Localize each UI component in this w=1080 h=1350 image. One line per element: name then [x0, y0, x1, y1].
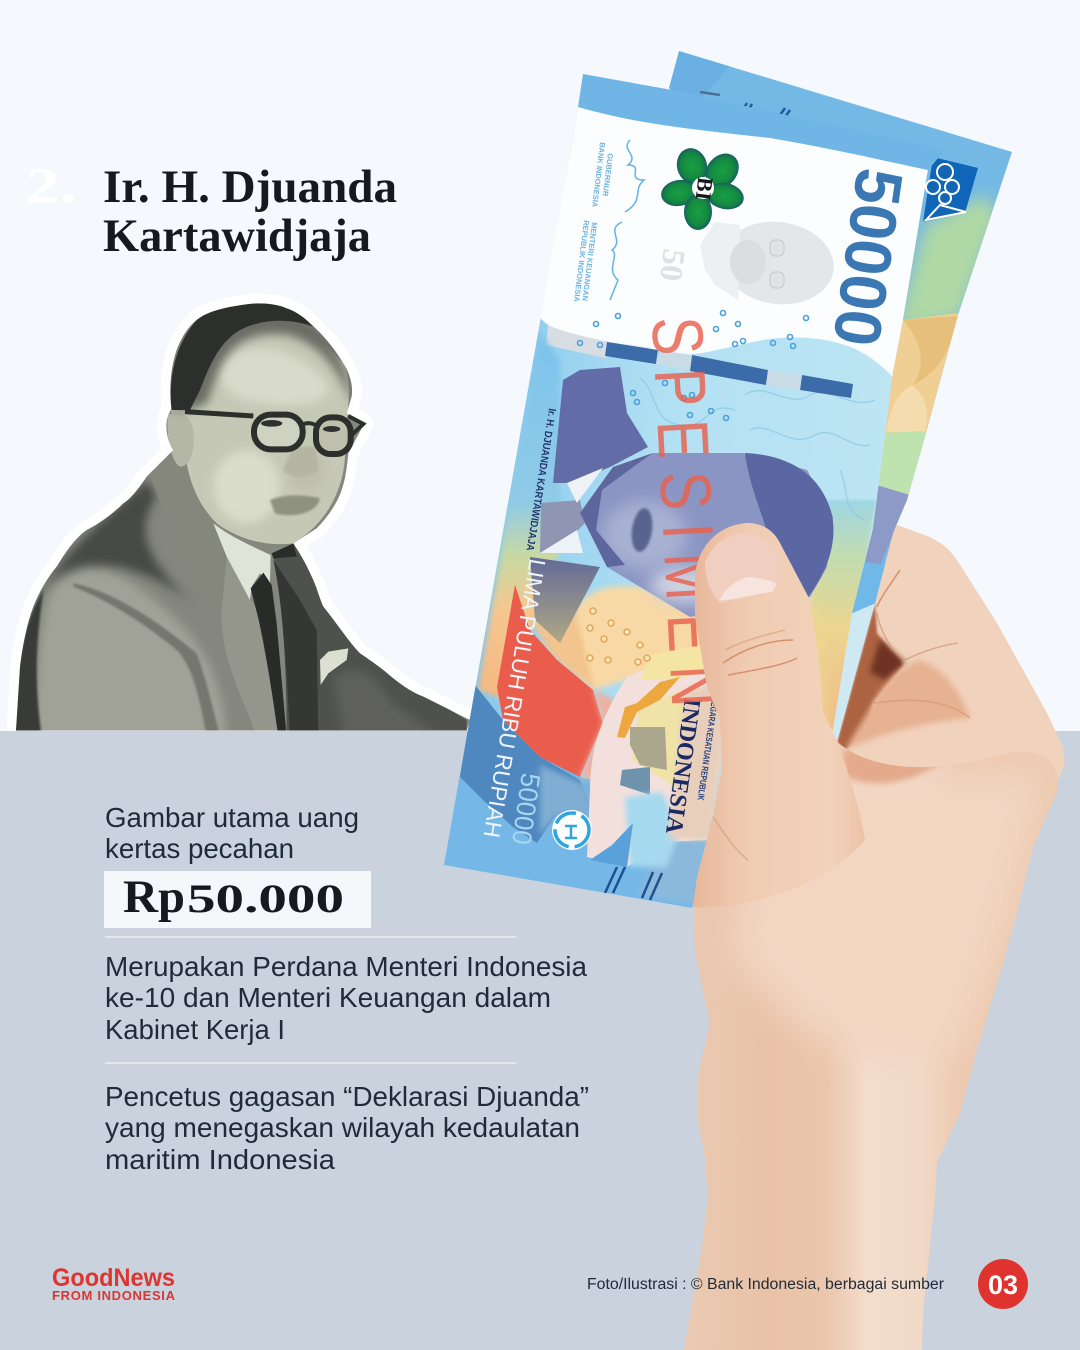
- logo GoodNews: GoodNews: [52, 1264, 175, 1292]
- note name: Ir. H. DJUANDA KARTAWIDJAJA: [523, 408, 558, 552]
- watermark portrait: [700, 215, 839, 311]
- front sheet lower blue: [444, 685, 712, 908]
- front sheet dark blue arc: [460, 685, 590, 843]
- portrait: suit: [553, 367, 648, 483]
- intro text: Gambar utama uang: [105, 802, 359, 833]
- front sheet light blue by seal: [540, 765, 595, 835]
- paragraph: Deklarasi Djuanda: maritim Indonesia: [105, 1144, 335, 1175]
- jacket light left arm: [33, 569, 227, 737]
- small captions: MENTERI KEUANGAN: [580, 222, 599, 301]
- palm upper light: [730, 760, 1040, 1060]
- front sheet holographic right edge: [800, 500, 876, 735]
- finger lines: [713, 570, 970, 860]
- portrait: face edge: [580, 453, 653, 567]
- INDONESIA: INDONESIA: [660, 696, 705, 836]
- paragraph: prime minister: [105, 951, 587, 1045]
- title: Ir. H. Djuanda: [103, 161, 397, 213]
- portrait figure: [16, 303, 470, 730]
- small captions: GUBERNUR: [601, 153, 615, 197]
- mouth: [270, 495, 320, 515]
- glasses: [185, 412, 363, 454]
- portrait: eye feature: [629, 507, 655, 553]
- jacket shoulder shadow: [40, 478, 184, 597]
- hand: palm and thumb: [684, 523, 1058, 1350]
- back sheet pale strip: [832, 604, 875, 741]
- thumb: [693, 523, 865, 907]
- number 2: 2.: [25, 157, 77, 213]
- lower suit: [530, 557, 600, 643]
- denomination in words: LIMA PULUH RIBU RUPIAH: [479, 557, 551, 840]
- hair soft edge: [171, 302, 352, 410]
- bottom ticks: [605, 867, 662, 900]
- back sheet flower: [883, 313, 958, 433]
- middle finger shading: [845, 660, 970, 750]
- denomination label box: 50.000: [187, 876, 344, 921]
- main 50000 numeral: 50000: [819, 164, 917, 351]
- small dots: [578, 310, 808, 420]
- portrait: chin light: [650, 567, 720, 603]
- banknote back sheet: [669, 51, 1012, 741]
- portrait photo of Djuanda: [0, 290, 500, 737]
- ear: [167, 412, 194, 467]
- back sheet blue patch: [864, 562, 885, 614]
- fingers shading: [837, 603, 970, 750]
- hand: fingers behind banknote: [838, 525, 1065, 893]
- BI flower logo: BI: [691, 176, 718, 202]
- portrait: shirt lower: [540, 530, 583, 553]
- thumb creases: [723, 630, 797, 675]
- front sheet pale bottom grey blue: [640, 830, 715, 905]
- small captions: REPUBLIK INDONESIA: [572, 220, 591, 303]
- bottom seal: [552, 810, 592, 850]
- signatures: [610, 140, 644, 300]
- paragraph: Deklarasi Djuanda: Pencetus gagasan “Deklarasi Djuanda”: [105, 1081, 589, 1112]
- nail lunula: [720, 577, 777, 600]
- bank seal: [923, 157, 978, 222]
- small captions: BANK INDONESIA: [590, 142, 607, 208]
- banknote front sheet: [430, 60, 950, 908]
- tie: [251, 573, 287, 737]
- neck shadow: [272, 543, 297, 558]
- small 50000: 50000: [506, 771, 546, 847]
- intro text: kertas pecahan: [105, 833, 294, 864]
- cheek: [213, 450, 280, 523]
- hair: [171, 302, 313, 410]
- portrait: face highlight: [603, 501, 687, 569]
- background: top light area: [0, 0, 1080, 731]
- shirt collar: [213, 523, 271, 600]
- front sheet blue body: [444, 318, 893, 908]
- SPESIMEN overprint: SPESIMEN: [637, 315, 737, 709]
- island map: [587, 645, 730, 867]
- paragraph: prime minister: Merupakan Perdana Menteri Indonesia: [105, 951, 587, 982]
- back sheet darker fold: [669, 51, 730, 100]
- eyes: [261, 420, 340, 432]
- source credit: Foto/Ilustrasi : © Bank Indonesia, berbagai sumber: [587, 1276, 944, 1293]
- title: [103, 161, 397, 262]
- paragraph: prime minister: Kabinet Kerja I: [105, 1014, 285, 1045]
- nose shadow: [283, 447, 318, 477]
- finger fold shadow: [843, 749, 945, 783]
- ribbon pink fade: [580, 690, 625, 780]
- paragraph: prime minister: ke-10 dan Menteri Keuangan dalam: [105, 982, 551, 1013]
- portrait: face: [580, 453, 833, 617]
- page number badge: [978, 1259, 1028, 1309]
- jacket far left edge shadow: [16, 590, 44, 730]
- front sheet white panel: [530, 107, 928, 380]
- lapel: [152, 480, 160, 500]
- paragraph: Deklarasi Djuanda: yang menegaskan wilayah kedaulatan: [105, 1112, 580, 1143]
- denomination label box: Rp: [123, 871, 185, 923]
- face: [170, 310, 349, 544]
- watermark 50: 50: [653, 247, 693, 283]
- front sheet left colour edge: [478, 330, 560, 700]
- jacket sleeve fold shadow: [73, 583, 220, 737]
- red ribbon: [497, 585, 603, 777]
- front sheet top band: [565, 74, 938, 180]
- warm area ring dots: [587, 608, 650, 665]
- gap dark core: [870, 640, 905, 680]
- portrait: collar stripes: [540, 500, 585, 553]
- back sheet green area: [895, 195, 1000, 330]
- small captions: [572, 142, 615, 303]
- title: Kartawidjaja: [103, 210, 371, 262]
- security thread: [605, 342, 853, 398]
- portrait: hair: [745, 453, 833, 597]
- back sheet ticks: [700, 90, 791, 116]
- gap between fingers: [837, 603, 903, 750]
- note pattern squiggles: [530, 378, 875, 520]
- paragraph: Deklarasi Djuanda: [105, 1081, 589, 1175]
- thumb nail: [705, 533, 780, 603]
- intro text: [105, 802, 359, 864]
- logo GoodNews: FROM INDONESIA: [52, 1288, 176, 1303]
- back sheet lilac patch: [865, 486, 908, 564]
- BI flower logo: [659, 145, 746, 230]
- face highlight: [219, 349, 328, 405]
- front sheet warm left under suit: [530, 606, 595, 690]
- front sheet warm right: [720, 590, 830, 760]
- portrait: shirt: [567, 468, 603, 503]
- logo GoodNews: [52, 1264, 176, 1303]
- right side of suit: [273, 543, 467, 737]
- back sheet green band: [878, 431, 926, 498]
- pocket square: [320, 648, 348, 685]
- palm and wrist: [684, 742, 1058, 1350]
- NEGARA KESATUAN REPUBLIK: NEGARA KESATUAN REPUBLIK: [695, 697, 720, 801]
- front sheet warm centre: [565, 586, 740, 690]
- denomination label box: [104, 871, 371, 928]
- palm shading: [730, 749, 1040, 1060]
- front sheet grey watermark patch: [546, 325, 650, 358]
- background: bottom grey panel: [0, 731, 1080, 1350]
- portrait white outline: [16, 303, 470, 731]
- page number badge: 03: [988, 1270, 1018, 1300]
